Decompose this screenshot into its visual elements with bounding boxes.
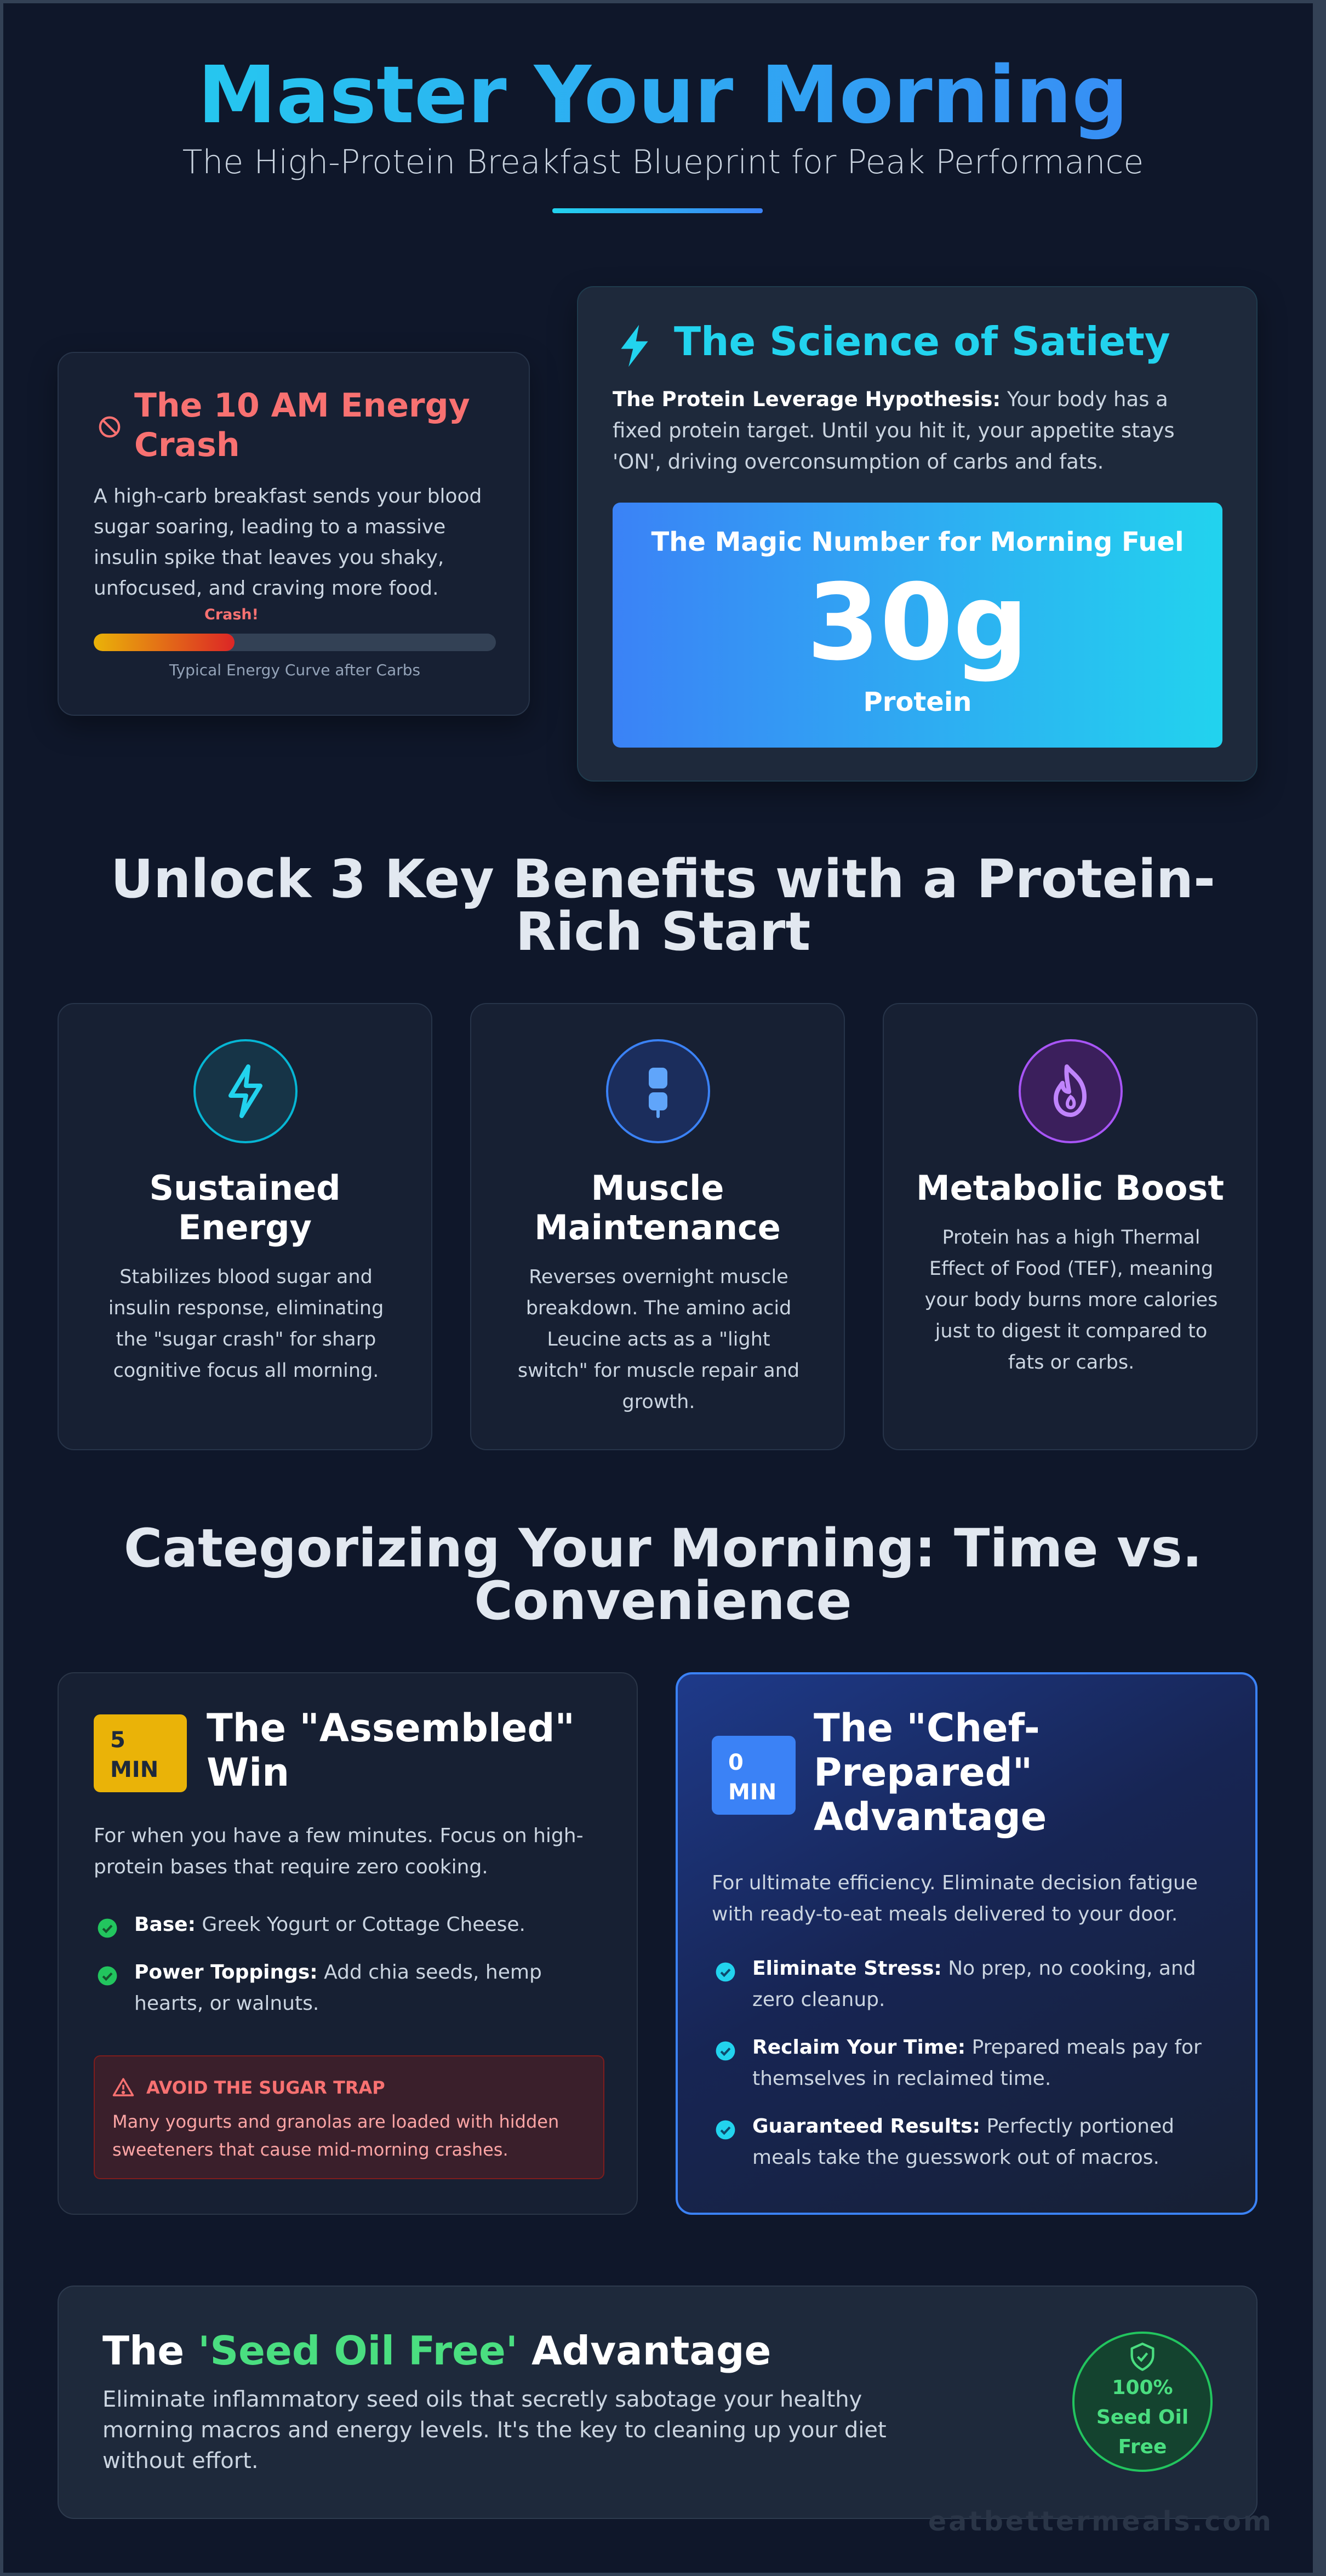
badge: seed oil free seal: 100% xyxy=(1112,2376,1173,2399)
panel: sustained energy xyxy=(58,1003,432,1450)
icon: flame xyxy=(1019,1039,1123,1143)
text: muscle maintenance: switch" for muscle repair and growth. xyxy=(518,1360,799,1413)
item: results: meals take the guesswork out of macros. xyxy=(752,2146,1159,2169)
item: time: themselves in reclaimed time. xyxy=(752,2067,1051,2090)
chart: energy bar xyxy=(94,634,496,651)
text: assembled description: For when you have a few minutes. Focus on high-protein bases that require zero cooking. xyxy=(94,1825,584,1878)
item: base: Base: Greek Yogurt or Cottage Cheese. xyxy=(134,1913,525,1936)
text: sustained energy: Stabilizes blood sugar and insulin response, eliminating the "sugar crash" for sharp cognitive focus all morning. xyxy=(108,1266,384,1382)
callout: magic number: 30g xyxy=(807,562,1028,684)
badge: 0 min xyxy=(712,1736,796,1815)
heading: assembled: The "Assembled" Win xyxy=(207,1706,575,1795)
heading: sustained energy: Sustained xyxy=(149,1168,341,1208)
title underline xyxy=(552,208,763,213)
icon: muscle xyxy=(606,1039,710,1143)
text: muscle maintenance: Reverses overnight muscle breakdown. The amino acid Leucine acts as a "light xyxy=(526,1266,791,1350)
callout: magic number: Protein xyxy=(864,687,971,717)
text: protein leverage: 'ON', driving overconsumption of carbs and fats. xyxy=(613,450,1104,474)
badge: 0 min: 0 xyxy=(728,1750,744,1775)
panel: chef prepared xyxy=(676,1672,1258,2215)
heading: energy crash: The 10 AM Energy Crash xyxy=(134,386,470,464)
heading: sustained energy: Energy xyxy=(178,1207,312,1247)
text: seed oil: Eliminate inflammatory seed oils that secretly sabotage your healthy xyxy=(102,2387,862,2412)
badge: 5 min: 5 xyxy=(110,1728,125,1753)
heading: muscle maintenance xyxy=(534,1168,781,1247)
heading: science: The Science of Satiety xyxy=(674,318,1170,364)
heading: benefits: Unlock 3 Key Benefits with a Protein-Rich Start xyxy=(111,848,1215,962)
heading: metabolic boost: Metabolic Boost xyxy=(916,1168,1224,1208)
badge: seed oil free seal xyxy=(1072,2332,1213,2472)
icon: warning xyxy=(113,2078,134,2096)
heading: muscle maintenance: Maintenance xyxy=(534,1207,781,1247)
text: seed oil: without effort. xyxy=(102,2448,259,2474)
label: crash: Crash! xyxy=(204,606,259,623)
callout: sugar trap xyxy=(94,2055,604,2179)
title xyxy=(0,43,1326,147)
subtitle: The High-Protein Breakfast Blueprint for Peak Performance xyxy=(182,143,1144,181)
text: protein leverage xyxy=(613,387,1175,474)
list: chef items xyxy=(716,1957,1202,2169)
title: Master Your Morning xyxy=(198,49,1128,141)
text: metabolic boost: Protein has a high Thermal Effect of Food (TEF), meaning your body burns more calories just to digest it compared to fats or carbs. xyxy=(925,1227,1218,1374)
panel: muscle maintenance xyxy=(470,1003,845,1450)
panel: seed oil free xyxy=(58,2286,1258,2519)
text: seed oil xyxy=(102,2387,887,2474)
item: stress: zero cleanup. xyxy=(752,1988,885,2011)
callout: sugar trap: AVOID THE SUGAR TRAP xyxy=(146,2077,385,2098)
item: toppings xyxy=(98,1961,542,2015)
panel: science of satiety xyxy=(577,286,1258,782)
callout: sugar trap: Many yogurts and granolas are loaded with hidden sweeteners that cause mid-morning crashes. xyxy=(112,2111,559,2160)
item: stress: Eliminate Stress: No prep, no cooking, and xyxy=(752,1957,1196,1980)
item: results xyxy=(716,2115,1174,2169)
item: stress xyxy=(716,1957,1196,2011)
heading: chef prepared xyxy=(814,1706,1047,1839)
icon: ban xyxy=(99,417,121,437)
item: toppings: hearts, or walnuts. xyxy=(134,1992,319,2015)
heading: seed oil: The 'Seed Oil Free' Advantage xyxy=(102,2328,771,2374)
text: seed oil: morning macros and energy levels. It's the key to cleaning up your diet xyxy=(102,2418,887,2443)
badge: seed oil free seal: Free xyxy=(1118,2436,1167,2458)
callout: magic number: The Magic Number for Morning Fuel xyxy=(651,527,1184,557)
list: assembled items xyxy=(98,1913,542,2015)
badge: seed oil free seal: Seed Oil xyxy=(1096,2406,1188,2429)
text: chef description: For ultimate efficiency. Eliminate decision fatigue with ready-to-eat meals delivered to your door. xyxy=(712,1872,1198,1925)
icon: energy xyxy=(193,1039,298,1143)
heading: categorizing: Categorizing Your Morning: Time vs. Convenience xyxy=(124,1518,1202,1632)
panel: metabolic boost xyxy=(883,1003,1258,1450)
heading: chef prepared: Prepared" xyxy=(814,1750,1032,1795)
panel: assembled win xyxy=(58,1672,638,2215)
text: muscle maintenance xyxy=(518,1266,799,1413)
badge: 0 min: MIN xyxy=(728,1780,776,1805)
text: protein leverage: fixed protein target. Until you hit it, your appetite stays xyxy=(613,419,1175,442)
heading: muscle maintenance: Muscle xyxy=(591,1168,724,1208)
heading: chef prepared: The "Chef- xyxy=(814,1706,1040,1751)
badge: 5 min: MIN xyxy=(110,1757,158,1782)
item: results: Guaranteed Results: Perfectly portioned xyxy=(752,2115,1174,2138)
item: time: Reclaim Your Time: Prepared meals pay for xyxy=(752,2036,1202,2059)
callout: magic number xyxy=(613,503,1222,748)
heading: chef prepared: Advantage xyxy=(814,1794,1047,1839)
text: crash description: A high-carb breakfast sends your blood sugar soaring, leading to a massive insulin spike that leaves you shaky, unfocused, and craving more food. xyxy=(94,485,482,600)
caption: energy curve: Typical Energy Curve after Carbs xyxy=(169,661,420,679)
icon: bolt xyxy=(621,324,648,367)
badge: 5 min xyxy=(94,1714,187,1792)
watermark: eatbettermeals.com xyxy=(928,2506,1273,2537)
text: protein leverage: The Protein Leverage Hypothesis: Your body has a xyxy=(613,387,1168,411)
item: toppings: Power Toppings: Add chia seeds, hemp xyxy=(134,1961,542,1984)
panel: energy crash xyxy=(58,352,530,716)
item: time xyxy=(716,2036,1202,2090)
heading: sustained energy xyxy=(149,1168,341,1247)
